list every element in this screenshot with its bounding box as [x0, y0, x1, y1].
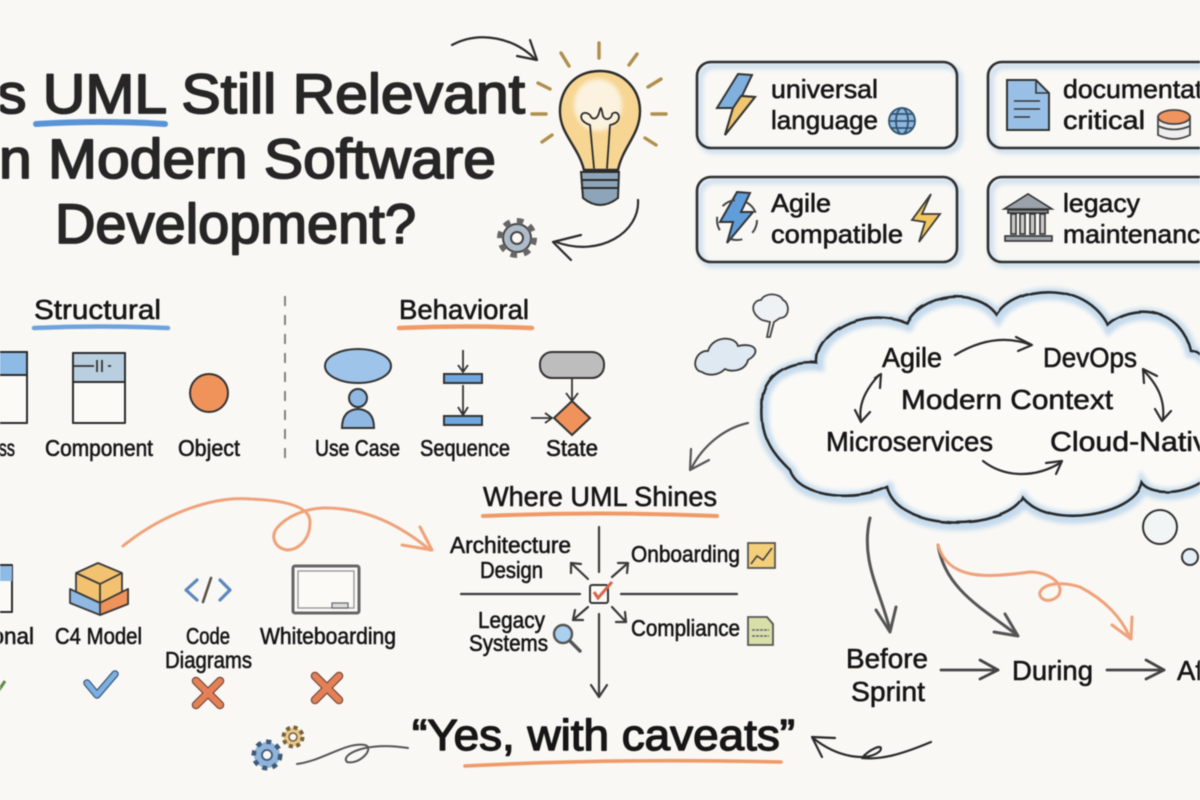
panel: Agile compatible: [697, 177, 960, 265]
icon: class box: [0, 352, 27, 423]
text: language: [771, 105, 878, 135]
arrow: orange to After: [938, 545, 1132, 639]
cycle arrows: [855, 337, 1171, 474]
label: Code Diagrams: Diagrams: [165, 647, 252, 673]
verdict underline: [465, 761, 781, 766]
label: Compliance: Compliance: [631, 615, 740, 641]
icon: check mark: [87, 674, 115, 695]
title: n Modern Software: [0, 127, 496, 190]
icon: X mark 2: [315, 676, 339, 700]
arrow: orange loop to Where UML Shines: [123, 499, 432, 550]
title: s UML Still Relevant: [0, 62, 525, 125]
label: Agile: Agile: [882, 342, 942, 373]
icon: object circle: [190, 374, 228, 412]
underline: Structural: [34, 326, 168, 328]
panel: universal language: [697, 62, 960, 151]
small cloud 2: [753, 294, 788, 337]
heading: Structural: Structural: [34, 294, 161, 325]
arrow: before to during: [941, 660, 998, 679]
label: Legacy Systems: Legacy: [478, 607, 545, 633]
panel: legacy maintenance: [988, 177, 1200, 265]
text: universal: [771, 74, 878, 104]
icon: gear: [500, 221, 534, 255]
label: During: During: [1012, 655, 1093, 686]
icon: gears: [254, 728, 302, 768]
label: Use Case: Use Case: [315, 435, 400, 461]
arrow: to bulb: [452, 37, 537, 60]
label: Before Sprint: Before: [846, 643, 928, 674]
label: Before Sprint: Sprint: [851, 676, 925, 707]
icon: code brackets: [186, 578, 230, 602]
label: Whiteboarding: Whiteboarding: [260, 623, 396, 649]
label: Sequence: Sequence: [420, 435, 510, 461]
icon: chart: [748, 543, 775, 568]
icon: database: [1158, 110, 1190, 139]
heading: Behavioral: Behavioral: [399, 294, 529, 325]
arrow: during to after: [1107, 660, 1164, 679]
icon: state: [531, 352, 604, 435]
icon: lightning with cycle: [717, 192, 757, 243]
arrow: to verdict: [812, 737, 931, 758]
icon: checkbox: [590, 582, 612, 603]
label: Object: Object: [178, 435, 241, 461]
text: legacy: [1063, 188, 1140, 218]
icon: relational table: [0, 565, 12, 612]
heading: Where UML Shines: Where UML Shines: [483, 481, 717, 512]
icon: component box: [73, 353, 125, 423]
label: Component: Component: [45, 435, 154, 461]
squiggle: [297, 745, 408, 764]
label: Architecture Design: [450, 532, 571, 583]
label: Legacy Systems: [469, 607, 548, 656]
label: Onboarding: Onboarding: [631, 541, 740, 567]
icon: institution building: [1004, 194, 1052, 241]
icon: magnifier: [554, 625, 580, 651]
label: Architecture Design: Architecture: [450, 532, 571, 558]
icon: light bulb: [532, 43, 666, 205]
arrow: to During: [938, 545, 1018, 636]
label: Microservices: Microservices: [826, 426, 993, 457]
arrow: cloud to Where UML Shines: [690, 423, 748, 470]
icon: whiteboard: [293, 566, 359, 613]
panel: modern context cloud: [762, 292, 1200, 525]
icon: globe: [889, 108, 915, 134]
arrow: to gear: [553, 200, 638, 260]
verdict quote: “Yes, with caveats”: [412, 711, 795, 760]
icon: sequence: [444, 350, 482, 425]
label: Code Diagrams: Code: [186, 623, 230, 649]
title: Development?: [55, 192, 416, 255]
icon: yellow lightning: [912, 194, 940, 242]
icon: document: [1007, 80, 1049, 130]
panel: documentation critical: [988, 62, 1200, 151]
divider: [284, 296, 286, 463]
icon: lightning bolt: [717, 74, 755, 135]
text: compatible: [771, 219, 903, 249]
icon: C4 cubes: [70, 563, 128, 615]
label: Architecture Design: Design: [480, 557, 543, 583]
thought bubbles: [1143, 510, 1198, 565]
label: DevOps: DevOps: [1043, 342, 1137, 373]
text: critical: [1063, 105, 1145, 135]
icon: X mark 1: [196, 681, 220, 705]
small cloud 1: [695, 339, 755, 375]
icon: green check: [0, 681, 5, 690]
arrow: to Before Sprint: [867, 518, 896, 632]
label: Legacy Systems: Systems: [469, 630, 548, 656]
label: Before Sprint: [846, 643, 928, 707]
label: Modern Context: Modern Context: [901, 384, 1113, 415]
icon: use case: [325, 349, 391, 428]
label: C4 Model: C4 Model: [55, 623, 142, 649]
text: Agile: [771, 188, 831, 218]
title: [0, 62, 525, 255]
cross lines and arrows: [461, 527, 737, 697]
label: Code Diagrams: [165, 623, 252, 673]
underline: Behavioral: [399, 326, 532, 328]
underline: Where UML Shines: [483, 514, 717, 516]
label: State: State: [546, 435, 598, 461]
icon: compliance document: [748, 617, 773, 645]
title underline: [36, 122, 165, 124]
